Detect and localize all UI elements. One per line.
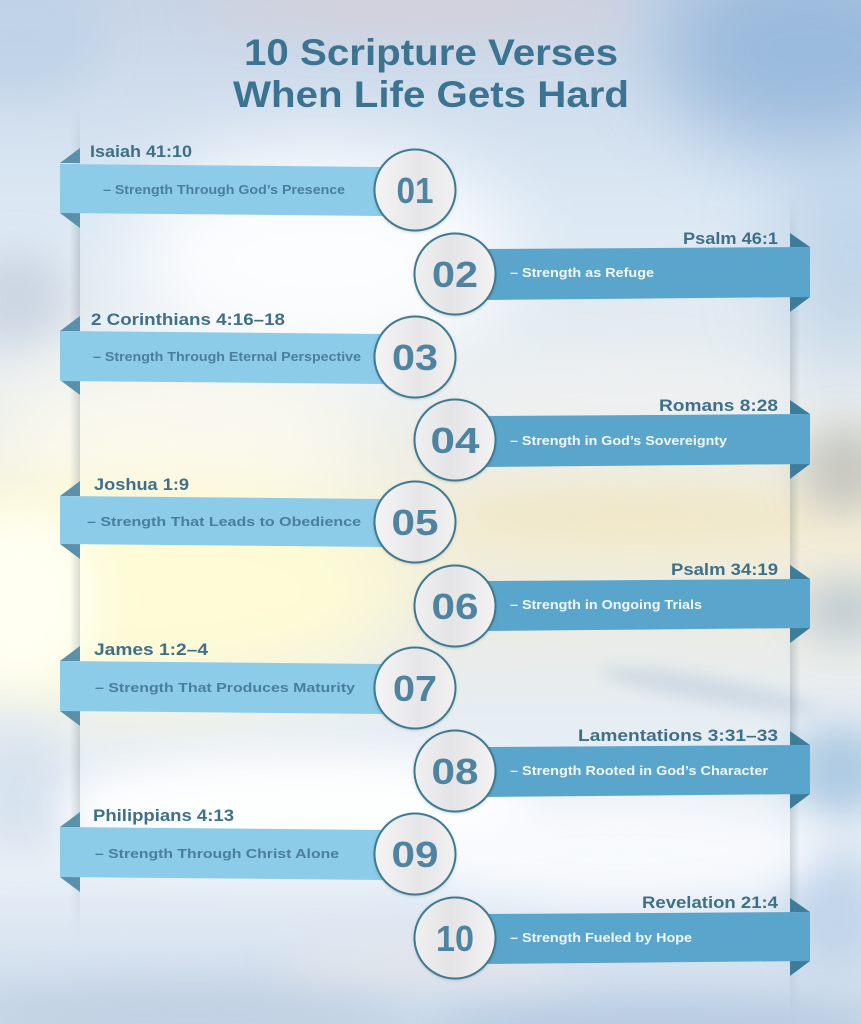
item 07	[60, 640, 456, 728]
item 08: 08	[432, 751, 478, 792]
item 09: Philippians 4:13	[93, 806, 234, 825]
title: 10 Scripture Verses	[244, 32, 618, 73]
side shadows of centre panel	[70, 105, 800, 1024]
item 01	[60, 142, 456, 230]
item 05: – Strength That Leads to Obedience	[87, 515, 361, 529]
item 03	[60, 310, 456, 398]
title: When Life Gets Hard	[233, 74, 629, 115]
item 09: 09	[392, 834, 438, 875]
item 08	[414, 726, 810, 812]
item 06: Psalm 34:19	[671, 560, 778, 579]
item 05: 05	[392, 502, 438, 543]
item 10	[414, 893, 810, 978]
item 01: Isaiah 41:10	[90, 142, 192, 161]
item 05: Joshua 1:9	[94, 475, 189, 494]
item 10: 10	[436, 918, 474, 959]
item 05	[60, 475, 456, 562]
item 07: James 1:2–4	[94, 640, 209, 659]
item 03: 2 Corinthians 4:16–18	[91, 310, 285, 329]
item 07: 07	[393, 668, 437, 709]
item 07: – Strength That Produces Maturity	[95, 681, 355, 695]
item 04: – Strength in God’s Sovereignty	[510, 434, 727, 448]
item 02: – Strength as Refuge	[510, 266, 654, 280]
item 06: – Strength in Ongoing Trials	[510, 598, 702, 612]
item 03: 03	[392, 337, 438, 378]
item 04: Romans 8:28	[659, 396, 778, 415]
item 02: 02	[432, 254, 478, 295]
item 03: – Strength Through Eternal Perspective	[93, 350, 361, 364]
item 04	[414, 396, 810, 480]
item 10: – Strength Fueled by Hope	[510, 931, 692, 945]
item 02: Psalm 46:1	[683, 229, 778, 248]
item 10: Revelation 21:4	[642, 893, 779, 912]
item 02	[414, 229, 810, 314]
item 09	[60, 806, 456, 894]
title	[233, 32, 629, 115]
item 09: – Strength Through Christ Alone	[95, 847, 339, 861]
item 06: 06	[432, 586, 478, 627]
item 08: – Strength Rooted in God’s Character	[510, 764, 768, 778]
item 01: – Strength Through God’s Presence	[103, 183, 345, 197]
item 06	[414, 560, 810, 646]
item 01: 01	[396, 170, 434, 211]
item 08: Lamentations 3:31–33	[578, 726, 778, 745]
item 04: 04	[430, 420, 480, 461]
